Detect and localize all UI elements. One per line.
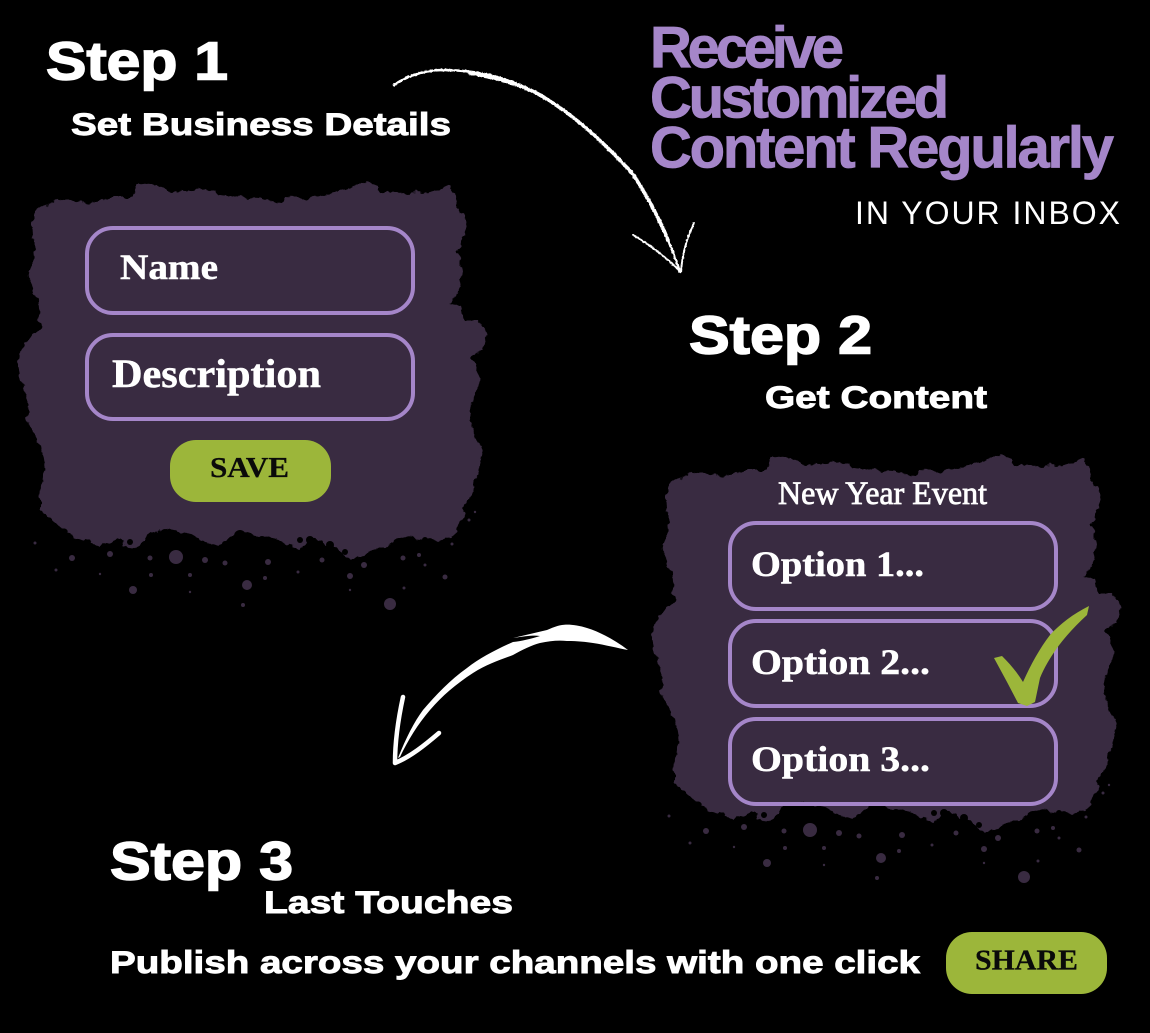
button: share <box>946 932 1107 994</box>
heading: step 1: Step 1 <box>46 32 228 92</box>
field: description: Description <box>112 351 321 396</box>
button: save <box>170 440 331 502</box>
subheading: get content: Get Content <box>765 379 988 415</box>
field: description <box>87 335 413 419</box>
subheading: set business details: Set Business Details <box>71 106 451 142</box>
heading: step 2: Step 2 <box>689 306 872 366</box>
option 1: Option 1... <box>751 544 924 584</box>
option 2 <box>730 621 1056 706</box>
option 2: Option 2... <box>751 642 930 682</box>
option 3 <box>730 719 1056 804</box>
title <box>650 16 1114 180</box>
panel background: business details ink blob <box>17 180 488 610</box>
button: save: SAVE <box>210 452 289 484</box>
option 3: Option 3... <box>751 739 930 779</box>
field: name <box>87 228 413 313</box>
title: Content Regularly <box>650 116 1114 180</box>
heading: step 3: Step 3 <box>110 832 293 892</box>
label: new year event: New Year Event <box>778 476 987 512</box>
subtitle: IN YOUR INBOX <box>855 195 1120 231</box>
arrow: step 1 to step 2 <box>394 70 694 272</box>
icon: check mark <box>994 606 1089 706</box>
button: share: SHARE <box>975 944 1078 976</box>
arrow: step 2 to step 3 <box>395 625 628 763</box>
title: Customized <box>650 66 949 130</box>
title: Receive <box>650 16 844 80</box>
option 1 <box>730 523 1056 609</box>
panel background: content options ink blob <box>651 453 1122 883</box>
field: name: Name <box>120 247 218 287</box>
subheading: last touches: Last Touches <box>264 884 513 920</box>
text: publish across channels: Publish across your channels with one click <box>110 944 921 980</box>
